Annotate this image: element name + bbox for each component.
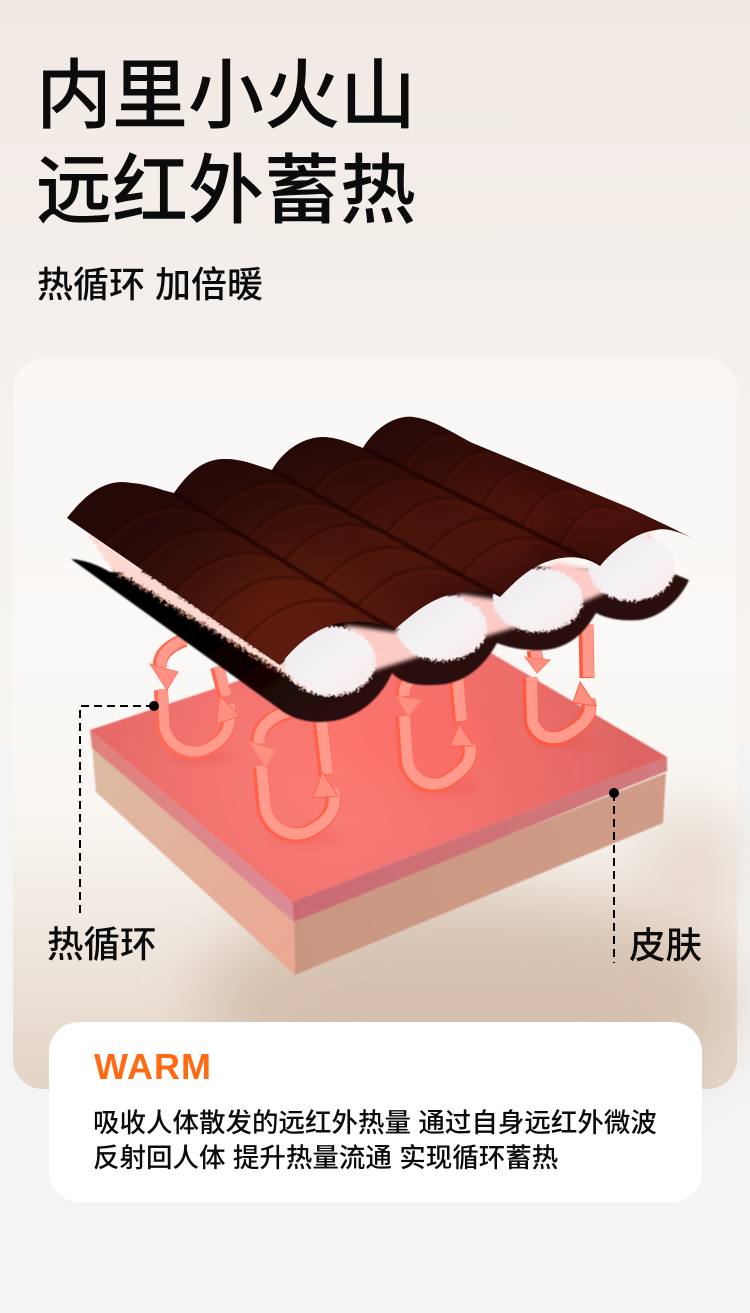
skin: left side (92, 745, 295, 975)
label: heat circulation: 热循环 (47, 924, 156, 965)
skin: right side (294, 773, 666, 975)
skin: right rim (292, 757, 667, 922)
skin: left rim (90, 730, 294, 922)
fluff: orange hair tint along strip (112, 570, 312, 692)
ground shadow under skin block (200, 800, 740, 1110)
skin block (90, 617, 667, 975)
fabric: upper quilted layer (67, 416, 692, 665)
fabric: pink inner strip along edge (87, 533, 345, 690)
card text: 吸收人体散发的远红外热量 通过自身远红外微波 (93, 1108, 657, 1138)
label: skin: 皮肤 (629, 925, 702, 966)
red glow on skin (300, 680, 520, 800)
heat circulation loop 4 (525, 624, 596, 739)
heat circulation loop 3 (396, 676, 474, 785)
panel: illustration background (13, 359, 737, 1089)
loop shadows (173, 736, 597, 845)
callout: skin leader (609, 788, 619, 963)
card text (93, 1108, 657, 1173)
fabric: valley shadows (174, 448, 600, 630)
title line 1: 内里小火山 (36, 54, 416, 139)
heat circulation loop 2 (248, 711, 338, 835)
title line 2: 远红外蓄热 (36, 149, 416, 234)
illustration: fabric layers over skin with heat loops (67, 416, 750, 1090)
fluff: white down rolls (284, 535, 675, 696)
callout: heat circulation leader (80, 701, 159, 916)
heat circulation loop 1 (150, 639, 240, 753)
subtitle: 热循环 加倍暖 (37, 264, 263, 305)
skin: top face (90, 617, 667, 902)
fabric: lower dark layer (71, 559, 689, 722)
card: WARM description (49, 1022, 702, 1202)
card heading: WARM (94, 1046, 212, 1087)
fabric: pink strip along front (345, 532, 660, 672)
card text: 反射回人体 提升热量流通 实现循环蓄热 (93, 1143, 558, 1173)
fabric: quilt ribs (106, 436, 452, 544)
